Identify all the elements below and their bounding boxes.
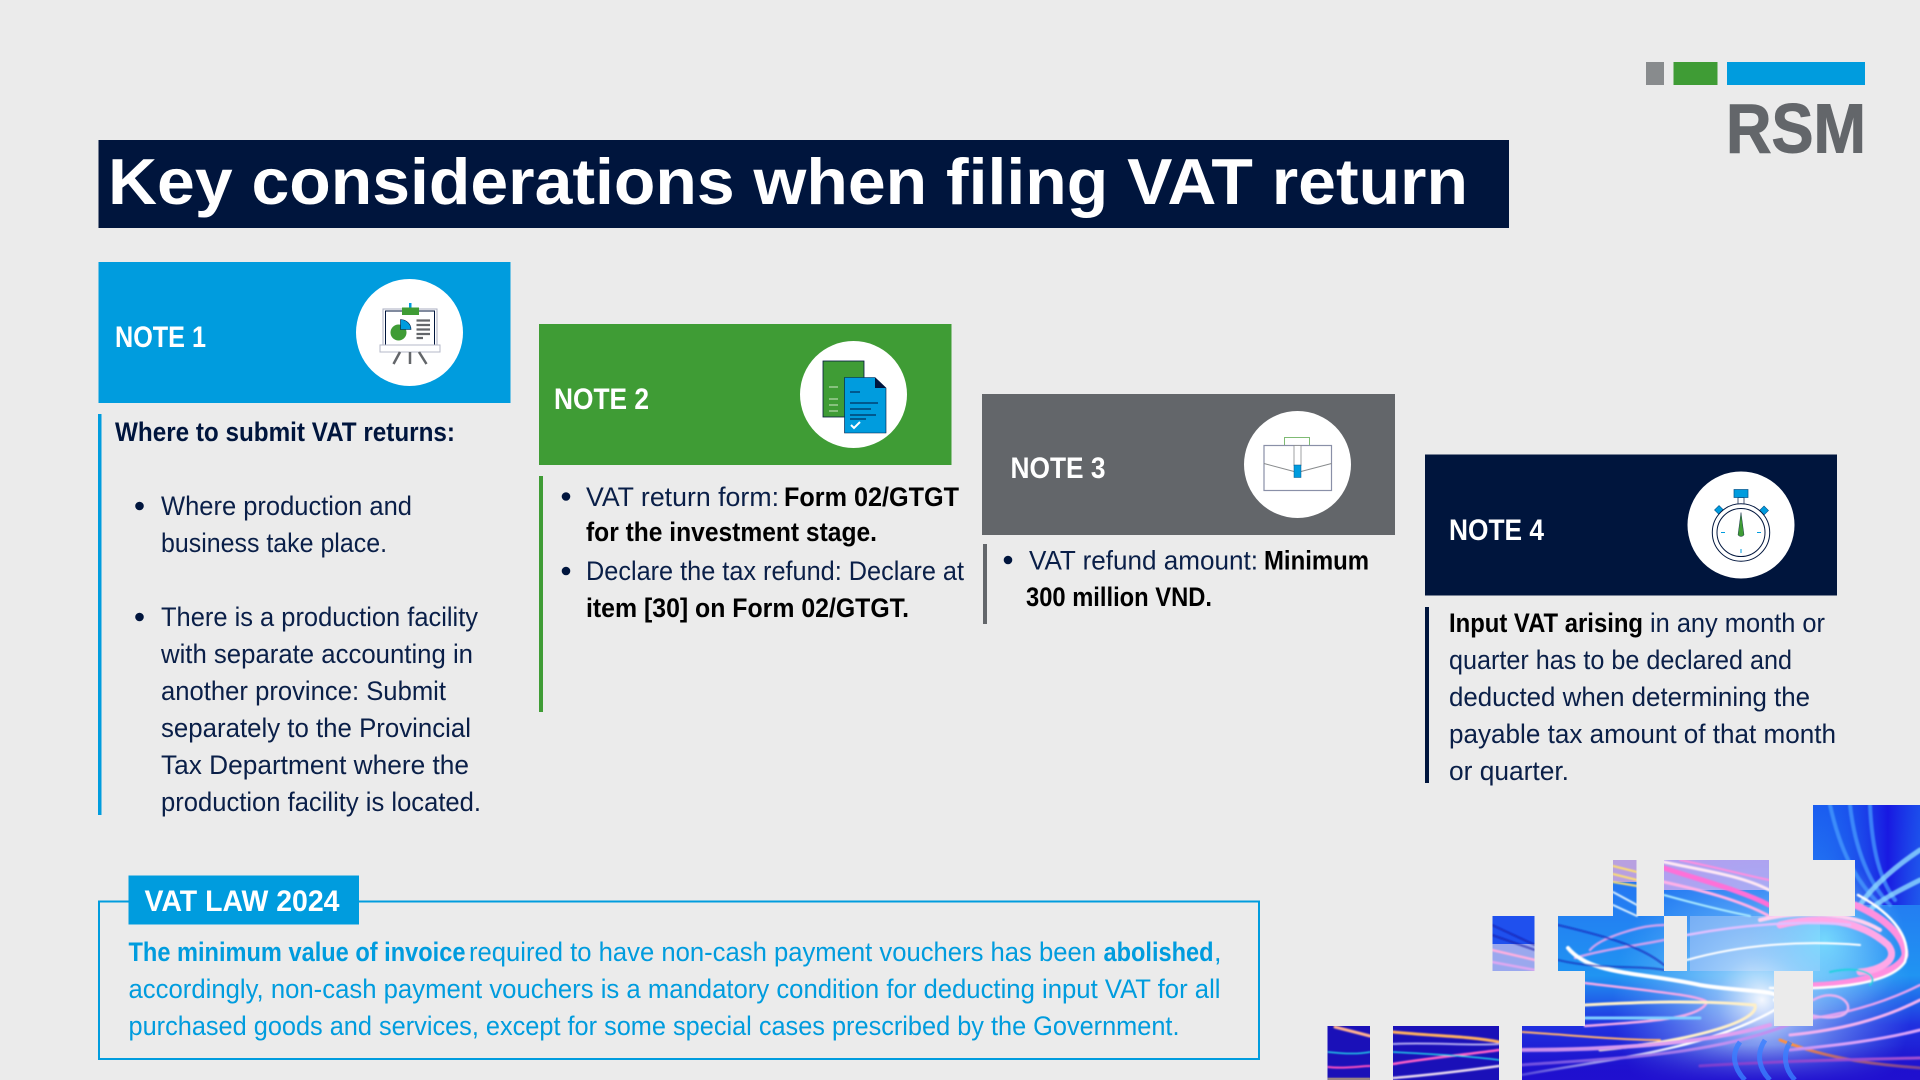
RSM logo: RSM [1726, 90, 1866, 168]
callout text [128, 937, 1222, 1041]
panel: note 3 [982, 394, 1395, 624]
callout text: required to have non-cash payment vouchers has been [469, 937, 1096, 967]
icon: briefcase [1264, 438, 1332, 490]
panel: note 1 [98, 262, 510, 817]
note 1 heading: Where to submit VAT returns: [115, 417, 455, 447]
panel: note 2 [539, 324, 964, 712]
note 2 bullet list: VAT return form: [586, 482, 779, 512]
note 4 body text: or quarter. [1449, 756, 1569, 786]
note 1 bullet list: production facility is located. [161, 787, 481, 817]
note 3 bullet list: Minimum [1264, 546, 1369, 576]
note 2 bullet list: Form 02/GTGT [784, 482, 959, 512]
note 3 bullet list: VAT refund amount: [1029, 546, 1258, 576]
note 1 header [98, 262, 510, 403]
callout text: , [1214, 937, 1222, 967]
callout text: accordingly, non-cash payment vouchers is a mandatory condition for deducting input VAT for all [128, 974, 1220, 1004]
panel: note 4 [1425, 454, 1837, 786]
icon: documents [823, 361, 886, 433]
note 4 header: NOTE 4 [1449, 514, 1544, 547]
callout text: The minimum value of invoice [128, 937, 466, 967]
note 2 bullet list [562, 482, 964, 623]
note 4 header [1425, 454, 1837, 596]
note 2 bullet list: for the investment stage. [586, 517, 877, 547]
left accent bar [983, 544, 987, 624]
left accent bar [1425, 607, 1429, 783]
note 1 bullet list: with separate accounting in [160, 639, 473, 669]
callout text: purchased goods and services, except for some special cases prescribed by the Government. [128, 1011, 1180, 1041]
note 4 body text: payable tax amount of that month [1449, 719, 1836, 749]
callout tag: VAT LAW 2024 [144, 885, 340, 918]
note 4 body text: quarter has to be declared and [1449, 645, 1792, 675]
note 4 body text: deducted when determining the [1449, 682, 1810, 712]
note 2 bullet list: Declare the tax refund: Declare at [586, 556, 964, 586]
left accent bar [98, 414, 102, 815]
note 3 bullet list [1004, 546, 1369, 612]
note 2 header: NOTE 2 [554, 383, 649, 416]
note 1 bullet list: another province: Submit [161, 676, 446, 706]
note 2 header [539, 324, 952, 465]
note 3 header [982, 394, 1395, 535]
note 1 bullet list [135, 491, 481, 817]
title banner: Key considerations when filing VAT return [108, 145, 1468, 218]
RSM logo [1646, 62, 1866, 168]
callout: VAT law 2024 [99, 876, 1259, 1059]
callout text: abolished [1104, 937, 1214, 967]
note 3 bullet list: 300 million VND. [1026, 582, 1212, 612]
callout tag [128, 876, 359, 924]
note 1 bullet list: Where production and [161, 491, 412, 521]
left accent bar [539, 476, 543, 712]
decorative light swirl artwork [1320, 800, 1920, 1080]
note 1 header: NOTE 1 [115, 321, 206, 354]
note 4 body text: Input VAT arising [1449, 608, 1643, 638]
note 1 bullet list: separately to the Provincial [161, 713, 471, 743]
callout box [99, 902, 1259, 1059]
note 1 bullet list: business take place. [161, 528, 387, 558]
icon: stopwatch [1712, 490, 1770, 561]
note 2 bullet list: item [30] on Form 02/GTGT. [586, 593, 909, 623]
note 3 header: NOTE 3 [1010, 452, 1106, 485]
note 1 bullet list: Tax Department where the [161, 750, 469, 780]
note 4 body text: in any month or [1650, 608, 1825, 638]
icon: presentation board [380, 303, 440, 364]
note 1 bullet list: There is a production facility [161, 602, 478, 632]
note 4 body text [1449, 608, 1836, 786]
